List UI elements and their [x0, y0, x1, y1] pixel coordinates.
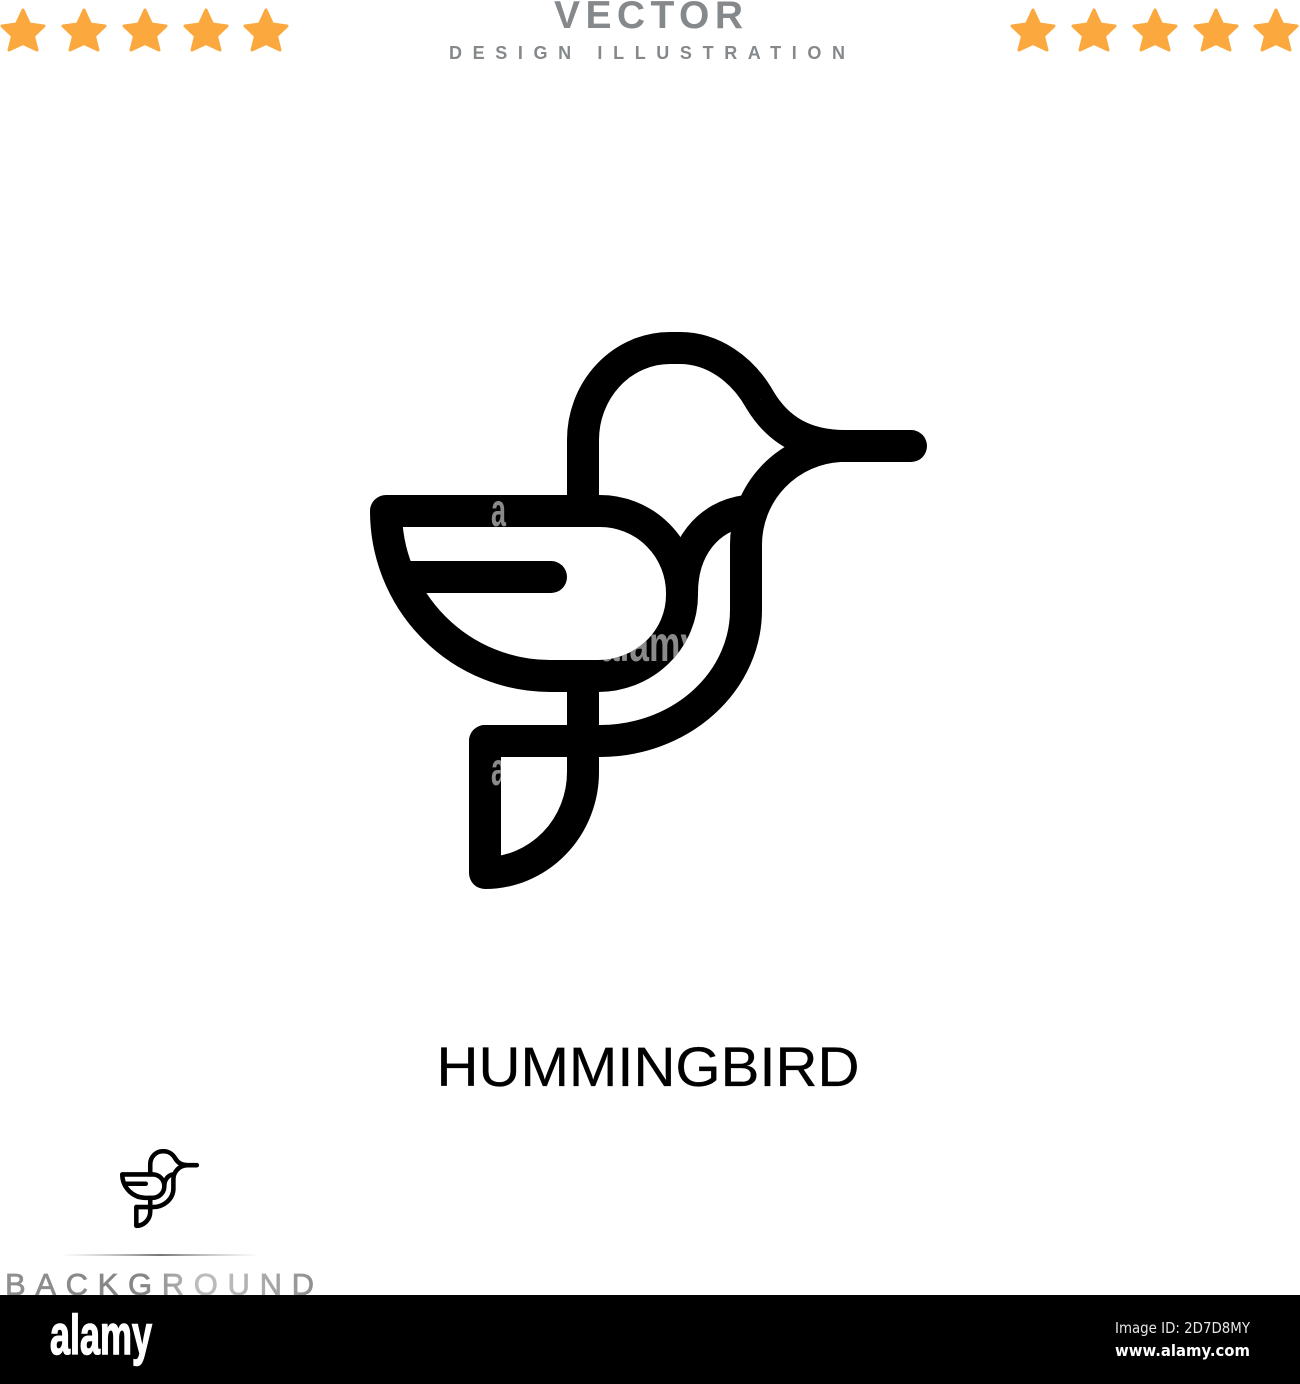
watermark: alamy marks on the bird: a: [491, 743, 506, 795]
title: HUMMINGBIRD: HUMMINGBIRD: [436, 1035, 860, 1098]
footer: website: www.alamy.com: [1115, 1341, 1250, 1360]
body curve: [485, 446, 840, 741]
wing feather line: [410, 561, 551, 593]
stars: right rating: [1012, 10, 1297, 50]
watermark: alamy marks on the bird: [492, 501, 687, 786]
subheading: DESIGN ILLUSTRATION: DESIGN ILLUSTRATION: [449, 43, 845, 63]
throat curve: [682, 511, 746, 593]
head and beak: [583, 348, 911, 511]
footer: image id: Image ID: 2D7D8MY: [1115, 1319, 1251, 1337]
icon: large hummingbird: [386, 348, 911, 873]
wing outline: [386, 511, 682, 676]
watermark: alamy marks on the bird: alamy: [600, 616, 700, 672]
footer logo: alamy: alamy: [50, 1303, 152, 1366]
tail: [485, 676, 583, 873]
icon: small hummingbird: [122, 1151, 197, 1226]
watermark: alamy marks on the bird: a: [491, 484, 506, 536]
footer bar: [0, 1295, 1300, 1384]
label: BACKGROUND: BACKGROUND: [5, 1267, 314, 1302]
divider line: [60, 1254, 260, 1256]
stars: left rating: [2, 10, 287, 50]
